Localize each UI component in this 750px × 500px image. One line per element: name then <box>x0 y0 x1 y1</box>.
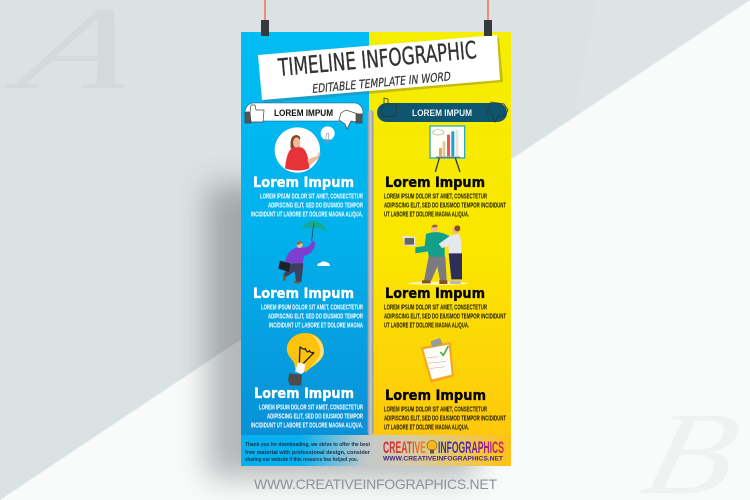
icon: thumbs down outline <box>487 102 508 122</box>
icon: presentation chart board <box>430 126 465 172</box>
footer thank-you note: Thank you for downloading, we strive to offer the best <box>245 442 370 448</box>
logo wordmark: WWW.CREATIVEINFOGRAPHICS.NET <box>383 456 503 462</box>
body text: LOREM IPSUM DOLOR SIT AMET, CONSECTETUR <box>384 194 487 200</box>
panel: left blue column <box>241 32 369 436</box>
poster <box>241 32 511 466</box>
body text: ADIPISCING ELIT, SED DO EIUSMOD TEMPOR <box>267 414 363 420</box>
body text: INCIDIDUNT UT LABORE ET DOLORE MAGNA <box>269 322 363 330</box>
body text <box>384 304 506 330</box>
body text: INCIDIDUNT UT LABORE ET DOLORE MAGNA ALIQUA. <box>251 212 363 218</box>
title text: TIMELINE INFOGRAPHIC <box>276 36 478 82</box>
body text: ADIPISCING ELIT, SED DO EIUSMOD TEMPOR <box>268 314 363 320</box>
body text: ADIPISCING ELIT, SED DO EIUSMOD TEMPOR <box>268 202 363 210</box>
left ribbon <box>245 103 363 129</box>
hanging strings and clips <box>261 0 492 36</box>
right item 2 <box>384 286 506 330</box>
body text: LOREM IPSUM DOLOR SIT AMET, CONSECTETUR <box>384 406 487 414</box>
centre divider <box>368 110 374 435</box>
body text <box>251 194 363 218</box>
body text <box>251 404 363 430</box>
body text: ADIPISCING ELIT, SED DO EIUSMOD TEMPOR INCIDIDUNT <box>384 202 506 210</box>
body text: ADIPISCING ELIT, SED DO EIUSMOD TEMPOR INCIDIDUNT <box>384 416 506 422</box>
body text <box>384 194 506 218</box>
footer thank-you note <box>245 442 370 463</box>
logo wordmark: CREATIVE <box>383 438 426 457</box>
body text: UT LABORE ET DOLORE MAGNA ALIQUA. <box>384 212 469 218</box>
right item 3 <box>384 388 506 432</box>
body text: INCIDIDUNT UT LABORE ET DOLORE MAGNA ALIQUA. <box>251 422 363 430</box>
heading: Lorem Impum <box>253 175 354 191</box>
footer thank-you note: free material with professional design, consider <box>245 450 370 456</box>
icon: clipboard with checkmark <box>421 338 454 383</box>
left item 2 <box>253 286 363 330</box>
body text <box>261 304 363 330</box>
heading: Lorem Impum <box>385 175 485 191</box>
logo wordmark: INFOGRAPHICS <box>438 438 504 457</box>
heading: Lorem Impum <box>385 388 486 404</box>
subtitle text: EDITABLE TEMPLATE IN WORD <box>312 69 451 96</box>
ribbon label: LOREM IMPUM <box>274 108 333 119</box>
left item 1 <box>251 175 363 218</box>
body text: UT LABORE ET DOLORE MAGNA ALIQUA. <box>384 322 469 330</box>
icon: thumbs down <box>339 110 362 129</box>
icon: flying businessman with umbrella <box>278 221 330 284</box>
body text <box>384 406 506 432</box>
body text: LOREM IPSUM DOLOR SIT AMET, CONSECTETUR <box>384 304 487 312</box>
heading: Lorem Impum <box>385 286 485 302</box>
icon: thumbs up <box>245 105 264 123</box>
panel: right yellow column <box>369 32 511 436</box>
body text: LOREM IPSUM DOLOR SIT AMET, CONSECTETUR <box>260 194 363 200</box>
right item 1 <box>384 175 506 218</box>
body text: LOREM IPSUM DOLOR SIT AMET, CONSECTETUR <box>259 404 363 412</box>
title banner <box>258 35 503 103</box>
right ribbon <box>377 98 508 122</box>
ribbon label: LOREM IMPUM <box>412 108 472 119</box>
icon: yellow lightbulb <box>287 333 324 385</box>
icon: woman with lightbulb <box>275 126 335 173</box>
body text: LOREM IPSUM DOLOR SIT AMET, CONSECTETUR <box>261 304 363 312</box>
footer band <box>241 435 511 466</box>
icon: two colleagues with laptop <box>403 225 468 285</box>
heading: Lorem Impum <box>253 286 354 302</box>
poster shadow <box>207 185 475 478</box>
background: lighter facet <box>574 0 750 117</box>
body text: UT LABORE ET DOLORE MAGNA ALIQUA. <box>384 424 469 432</box>
icon: logo bulb <box>427 440 437 454</box>
heading: Lorem Impum <box>254 386 354 402</box>
footer thank-you note: sharing our website if this resource has helped you. <box>245 457 358 463</box>
website caption: WWW.CREATIVEINFOGRAPHICS.NET <box>254 476 497 492</box>
logo wordmark <box>383 438 504 462</box>
left item 3 <box>251 386 363 430</box>
body text: ADIPISCING ELIT, SED DO EIUSMOD TEMPOR INCIDIDUNT <box>384 314 506 320</box>
icon: thumbs up outline <box>381 98 397 117</box>
